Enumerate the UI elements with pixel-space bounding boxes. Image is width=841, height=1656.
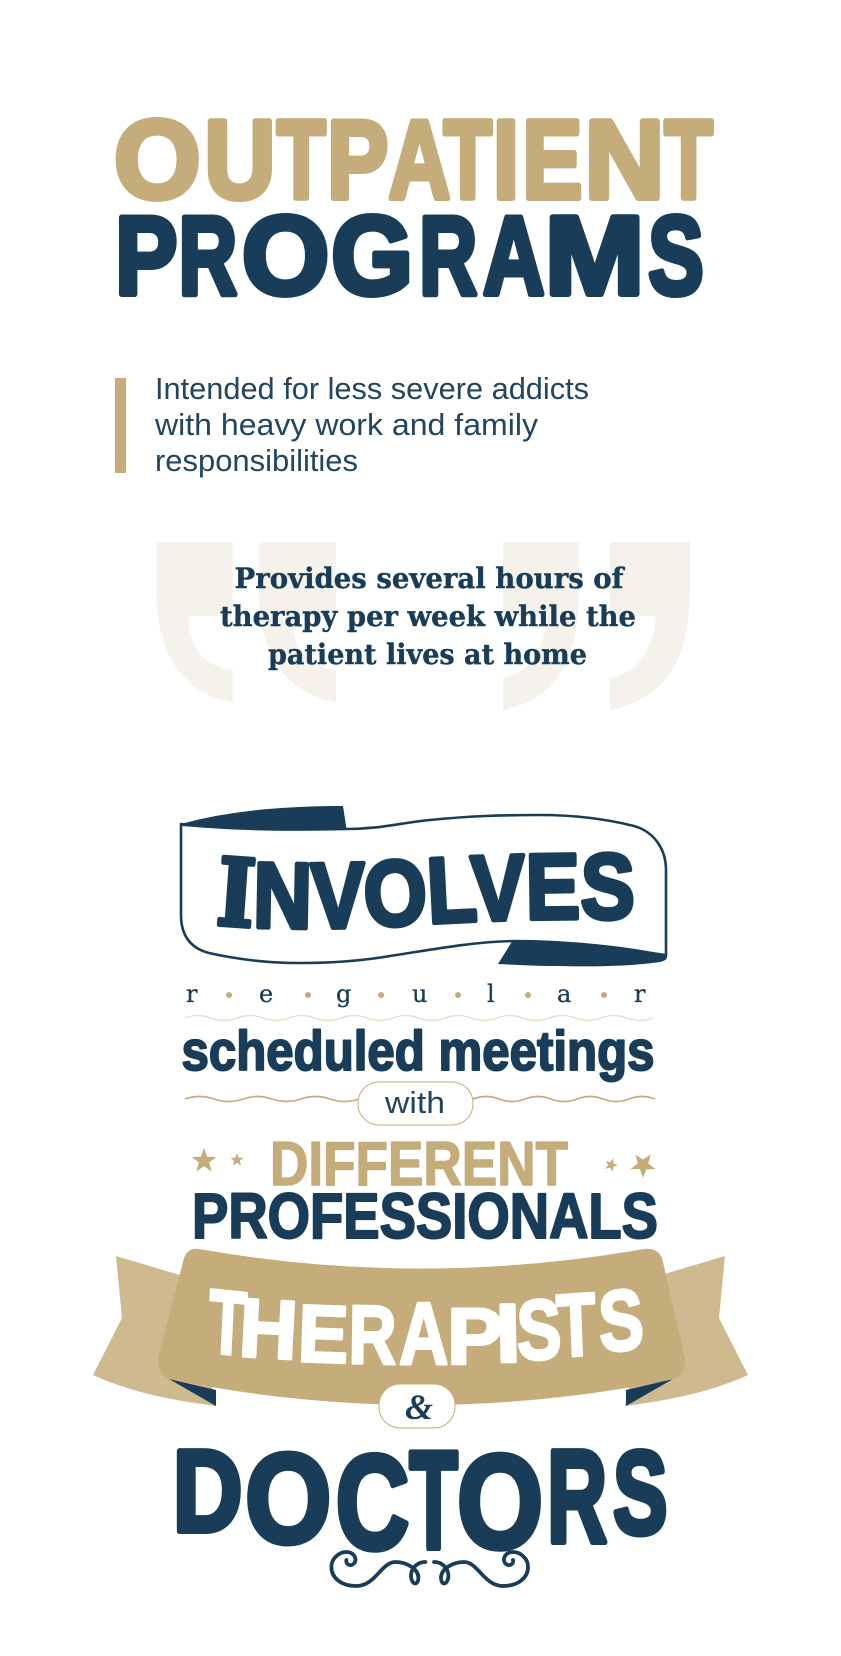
title line: PROGRAMS: G [331,194,413,318]
ribbon dark folds [169,1379,673,1406]
quote text: patient lives at home [268,638,587,671]
heading: scheduled meetings: scheduled meetings [182,1019,654,1082]
banner bottom-right fold [498,940,667,966]
title line: PROGRAMS: R [419,194,477,318]
separator dots [226,992,607,998]
ribbon word: S [595,1272,646,1371]
ribbon word: E [297,1289,350,1381]
title line: PROGRAMS: O [242,194,329,318]
icon: flourish [331,1552,528,1586]
title line: OUTPATIENT: T [277,98,326,222]
title [114,98,713,318]
title line: OUTPATIENT: O [114,98,200,222]
ribbon word: A [399,1284,448,1383]
icon: large quotation marks [156,542,690,710]
ribbon word: P [447,1292,503,1381]
intro text block: with heavy work and family [154,407,539,442]
heading: DOCTORS: T [409,1423,458,1578]
title line: OUTPATIENT: N [585,98,664,222]
icons: stars [192,1147,661,1181]
heading: DOCTORS: C [336,1428,409,1578]
banner top-left fold [181,806,346,830]
spaced word: regular: regular [186,980,646,1008]
title line: PROGRAMS: M [545,194,644,318]
ribbon word: T [206,1271,250,1375]
accent bar [115,378,126,473]
ribbon word: R [348,1288,397,1382]
quote text: Provides several hours of [234,562,625,595]
heading: PROFESSIONALS: PROFESSIONALS [192,1180,658,1252]
heading: DOCTORS: D [173,1426,242,1556]
ribbon [93,1249,748,1406]
title line: PROGRAMS: P [115,194,177,318]
heading: DOCTORS: S [613,1428,667,1560]
ribbon main band [158,1249,685,1405]
wavy line with pill [185,1082,655,1125]
wavy line with pill: with [384,1085,445,1120]
intro text block: responsibilities [155,443,358,478]
title line: PROGRAMS: A [483,194,544,318]
intro text block: Intended for less severe addicts [155,371,589,406]
banner outline [181,815,666,963]
heading: DOCTORS: O [457,1428,543,1576]
title line: PROGRAMS: R [179,194,237,318]
heading: DIFFERENT: DIFFERENT [270,1130,568,1199]
ampersand pill: & [405,1387,433,1427]
ampersand pill [379,1384,455,1428]
title line: OUTPATIENT: P [327,98,388,222]
title line: OUTPATIENT: E [522,98,582,222]
wavy line [185,1016,653,1020]
ribbon word: S [515,1282,563,1379]
title line: OUTPATIENT: T [664,98,713,222]
ribbon word: H [237,1281,300,1377]
quote text [220,562,636,671]
heading: DOCTORS: R [547,1423,607,1570]
heading: DOCTORS: O [245,1428,331,1570]
title line: OUTPATIENT: T [444,98,492,222]
title line: OUTPATIENT: U [204,98,275,222]
title line: OUTPATIENT: A [389,98,450,222]
ribbon tails [93,1256,748,1406]
intro text block [154,371,589,478]
title line: PROGRAMS: S [648,194,704,318]
ribbon word: I [495,1287,522,1380]
banner word: INVOLVES [216,851,634,930]
ribbon word: T [554,1274,598,1376]
quote text: therapy per week while the [220,600,636,633]
banner: INVOLVES [180,806,668,966]
title line: OUTPATIENT: I [493,98,519,222]
